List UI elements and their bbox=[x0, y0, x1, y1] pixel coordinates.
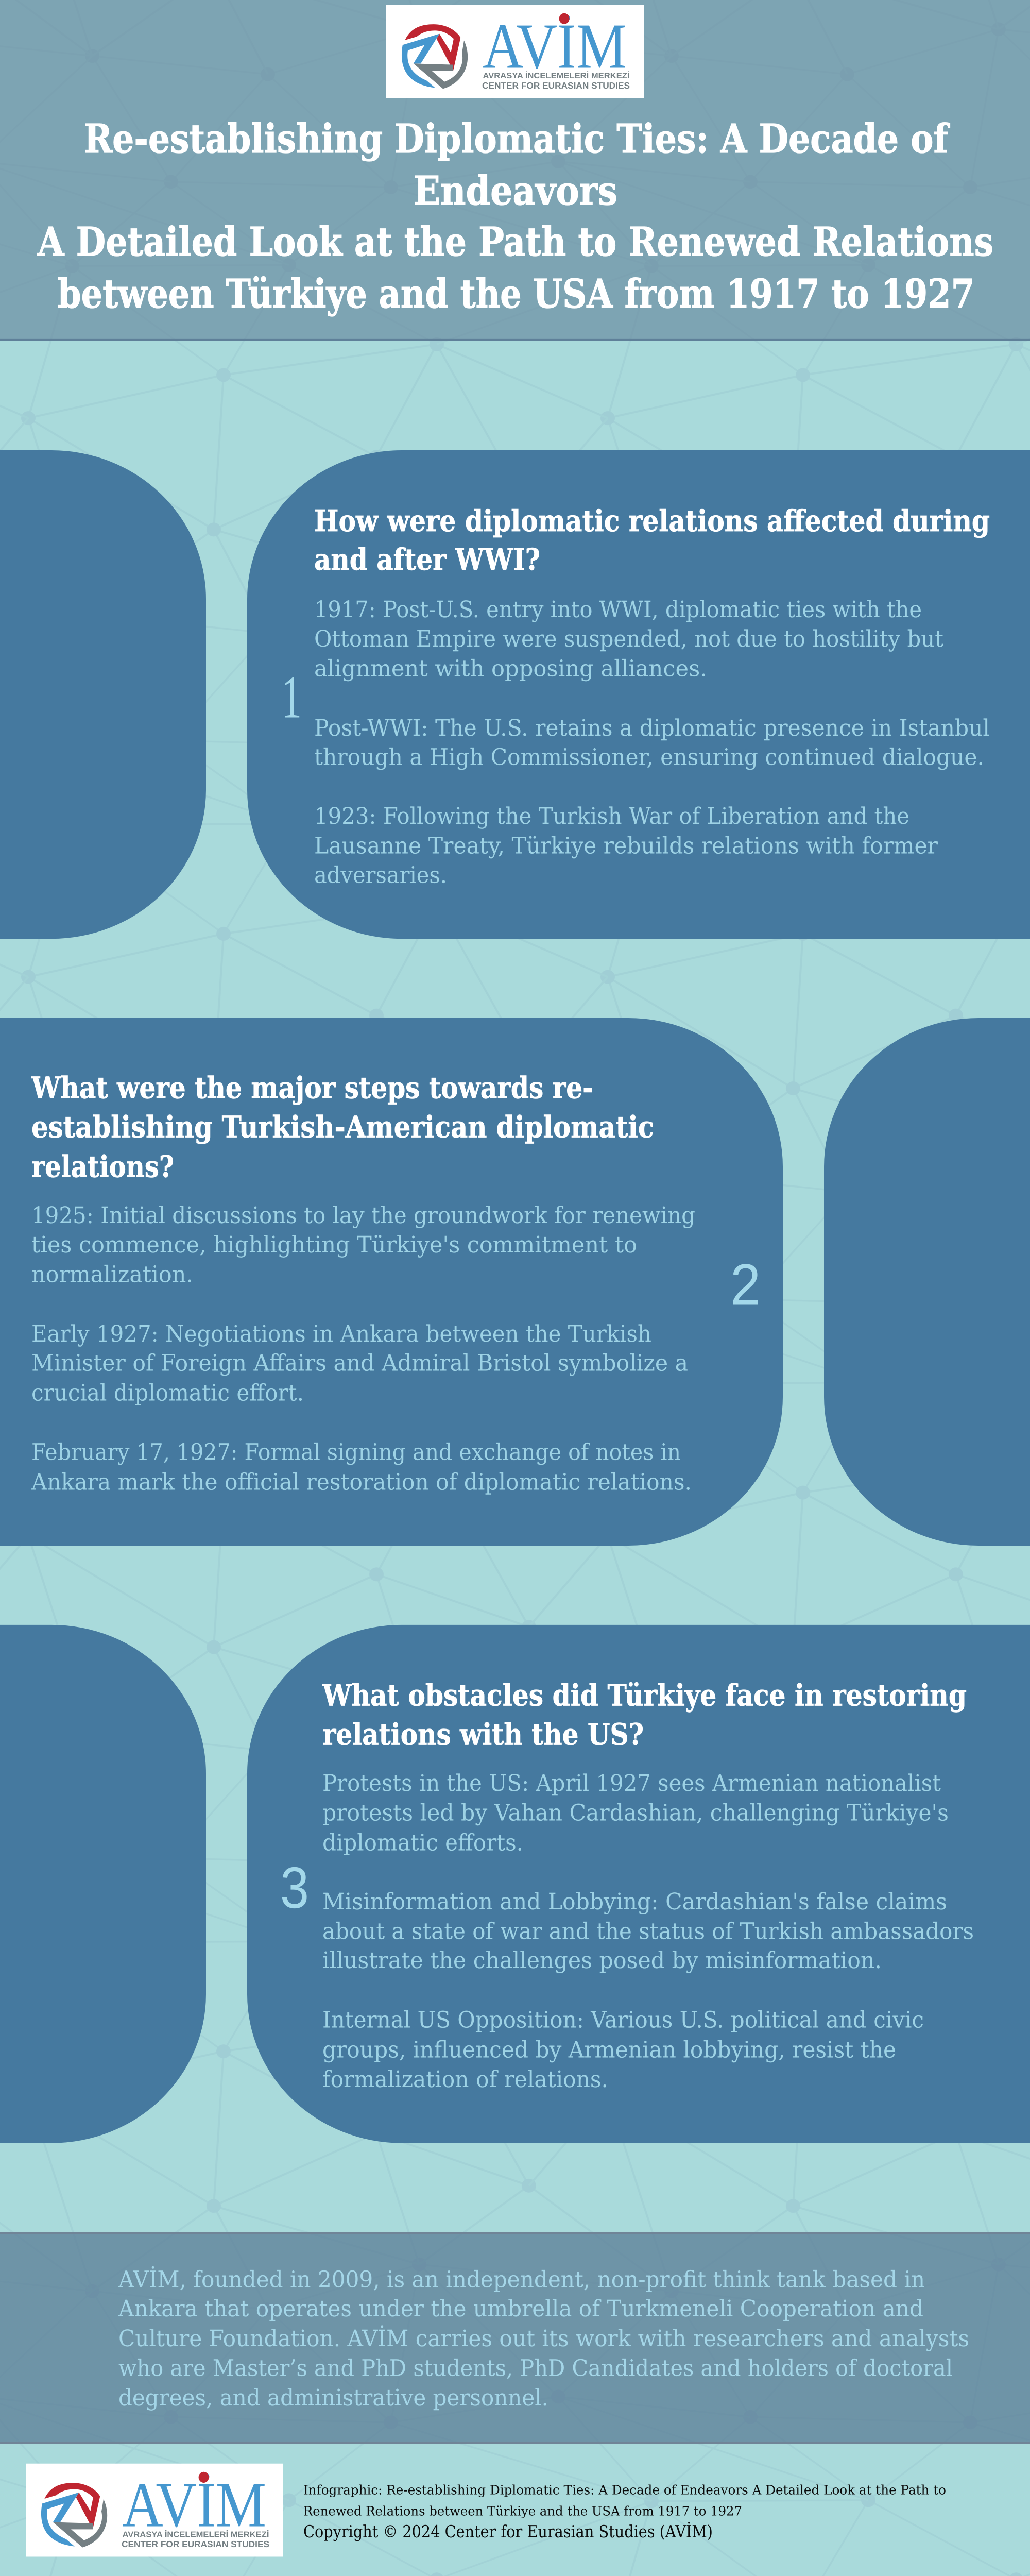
text block 2: normalization. bbox=[31, 1261, 193, 1287]
text block 1: 1923: Following the Turkish War of Liberation and the bbox=[314, 803, 909, 829]
footer credits bbox=[303, 2483, 946, 2542]
text block 1: 1917: Post-U.S. entry into WWI, diplomatic ties with the bbox=[314, 596, 922, 623]
logo: header: AVİM bbox=[483, 11, 627, 82]
panel 3: side block bbox=[0, 1625, 206, 2143]
text block 3: groups, influenced by Armenian lobbying, resist the bbox=[322, 2036, 896, 2063]
text block 2: 1925: Initial discussions to lay the groundwork for renewing bbox=[31, 1202, 695, 1229]
text block 1: Lausanne Treaty, Türkiye rebuilds relations with former bbox=[314, 832, 938, 859]
panel 3: obstacles in restoring relations bbox=[247, 1625, 1030, 2143]
heading 2: relations? bbox=[31, 1150, 174, 1184]
text block 3: formalization of relations. bbox=[322, 2066, 608, 2093]
text block 3 bbox=[322, 1770, 974, 2093]
logo: footer bbox=[26, 2464, 283, 2556]
about text: degrees, and administrative personnel. bbox=[118, 2384, 548, 2411]
text block 1: Ottoman Empire were suspended, not due to hostility but bbox=[314, 625, 943, 652]
about text: AVİM, founded in 2009, is an independent, non-profit think tank based in bbox=[118, 2266, 925, 2293]
about text: who are Master’s and PhD students, PhD Candidates and holders of doctoral bbox=[118, 2354, 953, 2381]
panel 2: major steps towards re-establishing relations bbox=[0, 1018, 783, 1546]
text block 1 bbox=[314, 596, 990, 888]
text block 2: crucial diplomatic effort. bbox=[31, 1379, 304, 1406]
text block 3: diplomatic efforts. bbox=[322, 1829, 523, 1856]
header band bbox=[0, 0, 1030, 341]
heading 1: and after WWI? bbox=[314, 543, 540, 577]
about text: Culture Foundation. AVİM carries out its work with researchers and analysts bbox=[118, 2325, 969, 2351]
text block 3: Protests in the US: April 1927 sees Armenian nationalist bbox=[322, 1770, 941, 1797]
footer credits: Renewed Relations between Türkiye and the USA from 1917 to 1927 bbox=[303, 2504, 742, 2519]
heading 1 bbox=[314, 504, 990, 577]
text block 2: February 17, 1927: Formal signing and exchange of notes in bbox=[31, 1438, 681, 1465]
text block 3: protests led by Vahan Cardashian, challenging Türkiye's bbox=[322, 1799, 949, 1826]
heading 2 bbox=[31, 1071, 654, 1184]
title bbox=[37, 115, 993, 317]
title: Endeavors bbox=[414, 167, 617, 214]
text block 1: alignment with opposing alliances. bbox=[314, 655, 707, 682]
number 2: 2 bbox=[730, 1252, 761, 1318]
panel 1: side block bbox=[0, 450, 206, 939]
about AVİM band bbox=[0, 2232, 1030, 2444]
text block 1: adversaries. bbox=[314, 861, 447, 888]
text block 1: Post-WWI: The U.S. retains a diplomatic presence in Istanbul bbox=[314, 715, 990, 741]
text block 3: illustrate the challenges posed by misinformation. bbox=[322, 1947, 882, 1974]
heading 3: relations with the US? bbox=[322, 1718, 644, 1752]
logo: header: CENTER FOR EURASIAN STUDIES bbox=[482, 81, 630, 91]
heading 2: What were the major steps towards re- bbox=[31, 1071, 593, 1106]
logo: footer: CENTER FOR EURASIAN STUDIES bbox=[122, 2539, 269, 2549]
logo: footer: AVRASYA İNCELEMELERİ MERKEZİ bbox=[123, 2530, 269, 2539]
text block 2: Early 1927: Negotiations in Ankara between the Turkish bbox=[31, 1320, 651, 1347]
footer credits: Copyright © 2024 Center for Eurasian Studies (AVİM) bbox=[303, 2521, 713, 2542]
text block 3: Internal US Opposition: Various U.S. political and civic bbox=[322, 2006, 924, 2033]
number 1: 1 bbox=[281, 663, 302, 731]
logo: header: AVRASYA İNCELEMELERİ MERKEZİ bbox=[483, 71, 629, 80]
text block 2: Ankara mark the official restoration of diplomatic relations. bbox=[31, 1468, 692, 1495]
text block 1: through a High Commissioner, ensuring continued dialogue. bbox=[314, 743, 984, 770]
text block 2: Minister of Foreign Affairs and Admiral Bristol symbolize a bbox=[31, 1349, 688, 1376]
text block 2 bbox=[31, 1202, 695, 1495]
panel 1: diplomatic relations during and after WWI bbox=[247, 450, 1030, 939]
text block 3: Misinformation and Lobbying: Cardashian's false claims bbox=[322, 1888, 947, 1914]
heading 2: establishing Turkish-American diplomatic bbox=[31, 1110, 654, 1145]
text block 3: about a state of war and the status of Turkish ambassadors bbox=[322, 1918, 974, 1944]
about text: Ankara that operates under the umbrella of Turkmeneli Cooperation and bbox=[118, 2295, 923, 2322]
number 3: 3 bbox=[280, 1855, 309, 1921]
panel 2: side block bbox=[824, 1018, 1030, 1546]
about text bbox=[118, 2266, 969, 2411]
logo: footer: AVİM bbox=[122, 2469, 266, 2540]
footer credits: Infographic: Re-establishing Diplomatic Ties: A Decade of Endeavors A Detailed Look at the Path to bbox=[303, 2483, 946, 2498]
heading 3 bbox=[322, 1679, 967, 1752]
text block 2: ties commence, highlighting Türkiye's commitment to bbox=[31, 1231, 637, 1258]
logo: header bbox=[386, 5, 644, 98]
